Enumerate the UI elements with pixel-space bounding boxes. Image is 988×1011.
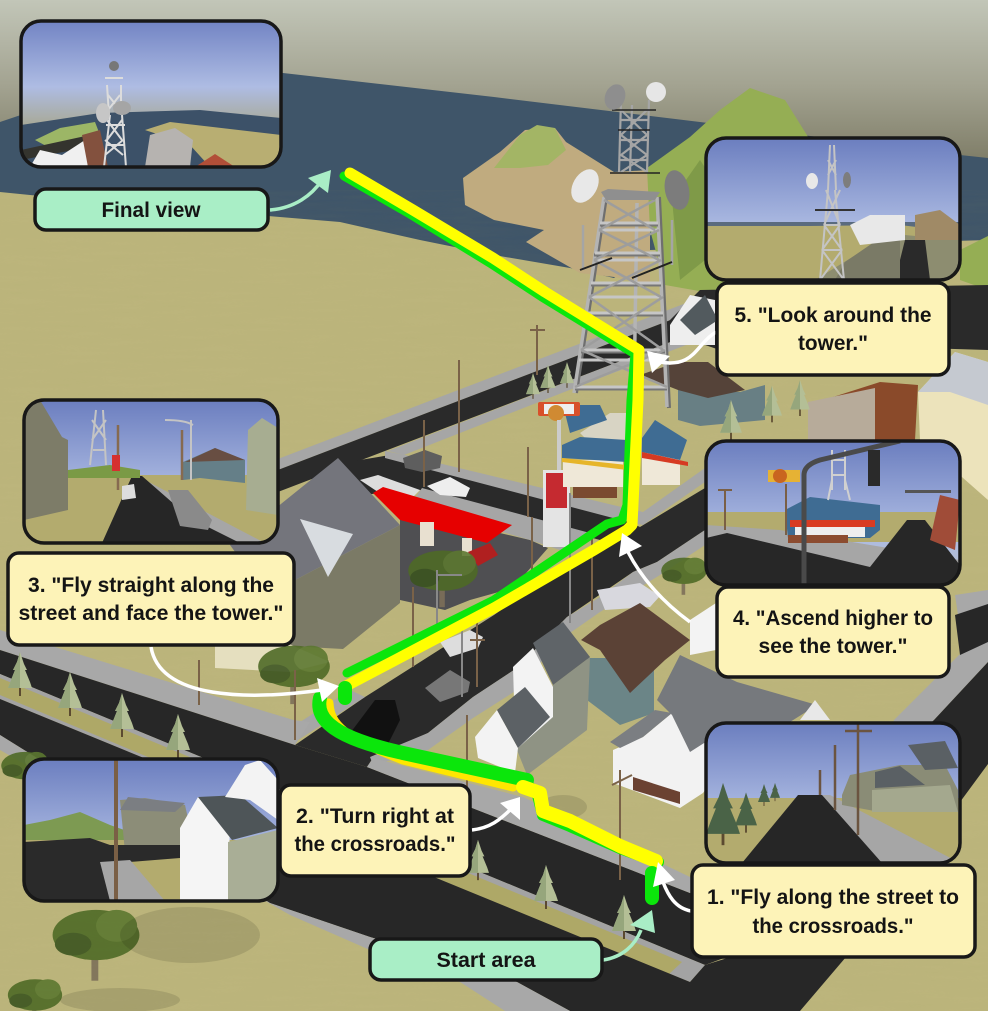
inset 3: street view with hummer xyxy=(24,400,278,543)
path segment: ascent and final leg xyxy=(344,173,639,685)
white house cluster xyxy=(475,603,830,808)
tower rungs xyxy=(575,223,667,389)
teal house with brown roof xyxy=(581,603,690,725)
right white house xyxy=(610,603,830,808)
road A lower lane with sidewalk xyxy=(0,699,850,1011)
callout: step 1 xyxy=(692,865,975,957)
arrow: start area xyxy=(603,910,655,960)
green hill behind tower xyxy=(647,88,860,300)
tree shadows xyxy=(60,795,587,1011)
callout: step 4: 4. "Ascend higher to xyxy=(733,607,933,630)
trees xyxy=(1,550,707,1011)
arrow: step 4 xyxy=(619,533,690,622)
communication tower xyxy=(574,100,672,408)
ambulance xyxy=(597,583,660,610)
restaurant xyxy=(538,402,688,498)
street lamp poles xyxy=(437,493,570,697)
path segment: along street xyxy=(523,782,658,898)
arrow: step 3 xyxy=(151,647,339,702)
tower upper mast xyxy=(619,100,649,173)
background: sea xyxy=(0,73,988,330)
inset: final view xyxy=(21,21,281,167)
arrow: step 1 xyxy=(653,862,691,911)
inset 1: start street view xyxy=(706,723,960,863)
gas price sign xyxy=(543,470,570,547)
inset 5: look around tower xyxy=(706,138,960,280)
arrow: step 2 xyxy=(472,797,520,830)
callout: step 2 xyxy=(280,785,470,876)
callout: step 3: street and face the tower." xyxy=(18,602,284,625)
tan building and brick xyxy=(808,382,918,440)
right pines xyxy=(526,362,810,440)
road E black xyxy=(330,455,640,540)
label: start area xyxy=(370,939,602,980)
right white apartment xyxy=(918,352,988,500)
tower legs xyxy=(574,197,669,408)
red gas canopy xyxy=(373,487,512,566)
callout: step 5: tower." xyxy=(798,332,868,355)
left white house xyxy=(475,622,590,775)
road A upper sidewalk and lane xyxy=(0,630,800,965)
label: start area: Start area xyxy=(436,949,536,972)
tower dishes xyxy=(566,81,693,212)
road C right side xyxy=(760,590,988,957)
road B xyxy=(270,488,705,767)
callout: step 3 xyxy=(8,553,294,645)
callout: step 2: the crossroads." xyxy=(294,833,456,856)
median with trees xyxy=(0,652,705,982)
tower braces xyxy=(575,200,667,387)
parked cars on road E xyxy=(403,450,470,497)
callout: step 1: the crossroads." xyxy=(752,915,914,938)
callout: step 5 xyxy=(717,283,949,375)
white house behind tower xyxy=(670,295,718,345)
label: final view xyxy=(35,189,268,230)
sandy peninsula with small hill xyxy=(463,125,650,285)
flight path xyxy=(319,173,658,898)
callout: step 4 xyxy=(717,587,949,677)
far right road xyxy=(660,285,988,350)
callout: step 4: see the tower." xyxy=(758,635,908,658)
callout: step 1: 1. "Fly along the street to xyxy=(707,886,959,909)
arrow: final view xyxy=(270,170,331,210)
arrow: step 5 xyxy=(647,332,716,373)
utility poles xyxy=(199,325,632,880)
inset 2: crossroads view xyxy=(24,759,278,901)
background: sky xyxy=(0,0,988,170)
gas station forecourt xyxy=(400,488,590,610)
callout: step 3: 3. "Fly straight along the xyxy=(28,574,274,597)
road shadow and cars on road B xyxy=(345,630,483,750)
callout: step 5: 5. "Look around the xyxy=(734,304,932,327)
teal house near tower xyxy=(640,362,765,426)
label: final view: Final view xyxy=(102,199,201,222)
callout: step 2: 2. "Turn right at xyxy=(296,805,454,828)
path segment: crossroads turn xyxy=(319,688,527,787)
road D far street xyxy=(270,290,720,495)
inset 4: ascend view xyxy=(706,441,960,585)
road E sidewalk xyxy=(385,451,705,525)
gray apartment house xyxy=(215,458,420,672)
